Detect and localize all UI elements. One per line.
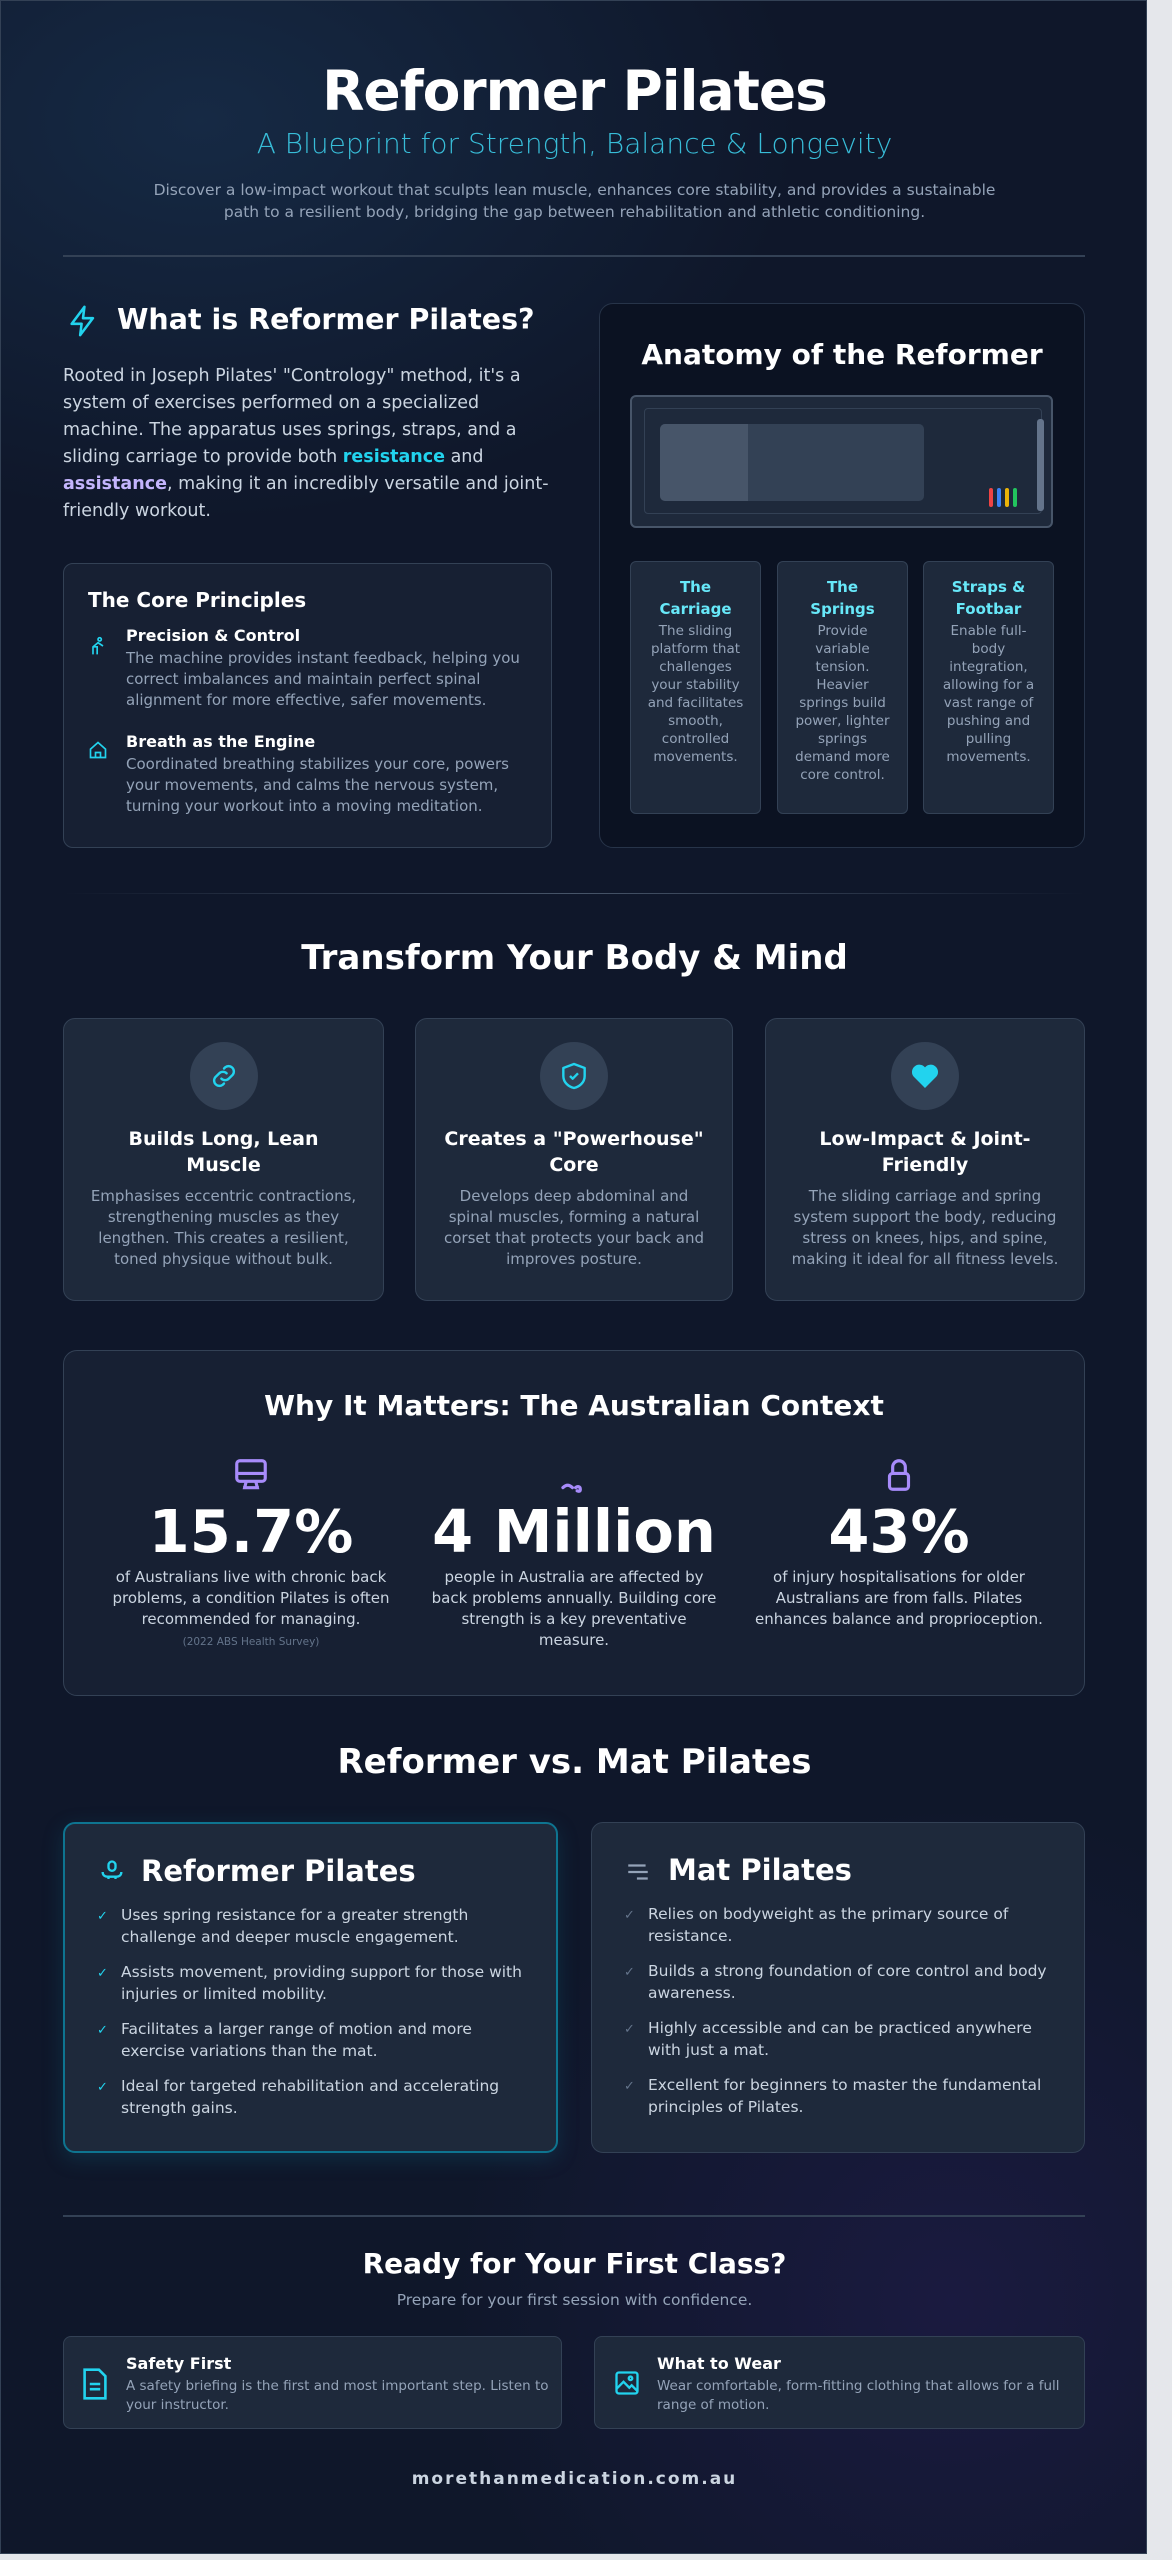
card: powerhouse core: Develops deep abdominal and spinal muscles, forming a natural corset that protects your back and improves posture. — [444, 1187, 704, 1268]
list: mat points: Highly accessible and can be practiced anywhere with just a mat. — [648, 2019, 1032, 2059]
list: mat points — [624, 1905, 1047, 2116]
card: long lean muscle — [63, 1018, 384, 1301]
card: carriage: The — [680, 578, 711, 596]
list: mat points: Builds a strong foundation of core control and body awareness. — [648, 1962, 1047, 2002]
card: long lean muscle: Muscle — [186, 1154, 261, 1176]
card: straps & footbar: Enable full-body integration, allowing for a vast range of pushing and pulling movements. — [943, 623, 1034, 765]
stat: 15.7%: of Australians live with chronic back problems, a condition Pilates is often recommended for managing. — [112, 1568, 390, 1628]
subtitle: A Blueprint for Strength, Balance & Longevity — [257, 127, 892, 160]
card: straps & footbar: Straps & — [952, 578, 1025, 596]
card: safety first: A safety briefing is the first and most important step. Listen to your instructor. — [126, 2378, 549, 2413]
principle: precision — [92, 626, 520, 709]
heading: mat: Mat Pilates — [668, 1853, 852, 1887]
panel: australian context — [63, 1350, 1085, 1696]
stat: 43%: of injury hospitalisations for older Australians are from falls. Pilates enhances balance and proprioception. — [755, 1568, 1043, 1628]
stat: 15.7%: 15.7% — [149, 1497, 353, 1566]
heading: core principles: The Core Principles — [88, 588, 306, 612]
card: safety first: Safety First — [126, 2354, 231, 2373]
heading: reformer vs mat: Reformer vs. Mat Pilates — [338, 1742, 812, 1782]
card: springs — [777, 561, 908, 814]
card: carriage: The sliding platform that challenges your stability and facilitates smooth, controlled movements. — [648, 623, 743, 765]
card: carriage — [630, 561, 761, 814]
list: reformer points: ✓ — [97, 1966, 108, 1981]
card: powerhouse core: Core — [549, 1154, 599, 1176]
list: reformer points: ✓ — [97, 1909, 108, 1924]
subheading: Prepare for your first session with confidence. — [397, 2291, 752, 2309]
list: reformer points: ✓ — [97, 2080, 108, 2095]
card: low impact: Low-Impact & Joint- — [819, 1128, 1031, 1150]
card: what to wear — [594, 2336, 1085, 2429]
panel: core principles — [63, 563, 552, 848]
list: mat points: ✓ — [624, 2079, 635, 2094]
panel: mat pilates — [591, 1822, 1085, 2153]
card: what to wear: Wear comfortable, form-fitting clothing that allows for a full range of motion. — [657, 2378, 1060, 2413]
list: reformer points: Assists movement, providing support for those with injuries or limited mobility. — [121, 1963, 522, 2003]
list: reformer points: ✓ — [97, 2023, 108, 2038]
card: long lean muscle: Emphasises eccentric contractions, strengthening muscles as they lengthen. This creates a resilient, toned physique without bulk. — [91, 1187, 356, 1268]
list: mat points: ✓ — [624, 1908, 635, 1923]
heading: what is reformer pilates: What is Reformer Pilates? — [117, 303, 535, 336]
card: long lean muscle: Builds Long, Lean — [128, 1128, 319, 1150]
heading: why it matters: Why It Matters: The Australian Context — [264, 1389, 884, 1422]
card: powerhouse core: Creates a "Powerhouse" — [444, 1128, 704, 1150]
stat: 4 million — [432, 1484, 716, 1649]
card: carriage: Carriage — [659, 600, 732, 618]
icon: lightning — [70, 306, 94, 336]
stat: 43% — [755, 1459, 1043, 1628]
heading: anatomy: Anatomy of the Reformer — [641, 338, 1043, 371]
intro paragraph: Rooted in Joseph Pilates' "Contrology" method, it's a system of exercises performed on a specialized machine. The apparatus uses springs, straps, and a sliding carriage to provide both resistance and assistance, making it an incredibly versatile and joint-friendly workout. — [63, 366, 549, 521]
icon: heart — [891, 1042, 959, 1110]
stat: 15.7%: (2022 ABS Health Survey) — [183, 1636, 319, 1648]
principle: breath: Breath as the Engine — [126, 732, 315, 751]
card: what to wear: What to Wear — [657, 2354, 781, 2373]
card: springs: The — [827, 578, 858, 596]
card: springs: Springs — [810, 600, 875, 618]
stat: 43%: 43% — [828, 1497, 970, 1566]
footer: morethanmedication.com.au — [412, 2469, 737, 2489]
card: low impact: The sliding carriage and spring system support the body, reducing stress on knees, hips, and spine, making it ideal for all fitness levels. — [792, 1187, 1058, 1268]
list: reformer points — [97, 1906, 522, 2117]
stat: 15.7% — [112, 1459, 390, 1648]
list: mat points: ✓ — [624, 1965, 635, 1980]
title: Reformer Pilates — [322, 59, 827, 123]
card: low impact: Friendly — [882, 1154, 968, 1176]
list: mat points: Relies on bodyweight as the primary source of resistance. — [648, 1905, 1008, 1945]
list: reformer points: Uses spring resistance for a greater strength challenge and deeper muscle engagement. — [121, 1906, 468, 1946]
card: springs: Provide variable tension. Heavier springs build power, lighter springs demand more core control. — [795, 623, 890, 783]
icon: link — [190, 1042, 258, 1110]
list: mat points: Excellent for beginners to master the fundamental principles of Pilates. — [648, 2076, 1041, 2116]
list: reformer points: Ideal for targeted rehabilitation and accelerating strength gains. — [121, 2077, 499, 2117]
diagram: reformer machine — [630, 395, 1053, 528]
heading: transform: Transform Your Body & Mind — [301, 938, 848, 978]
principle: breath — [90, 732, 509, 815]
panel: reformer pilates — [63, 1822, 558, 2153]
heading: reformer: Reformer Pilates — [141, 1854, 416, 1888]
stat: 4 million: people in Australia are affected by back problems annually. Building core strength is a key preventative measure. — [432, 1568, 716, 1649]
principle: precision: The machine provides instant feedback, helping you correct imbalances and maintain perfect spinal alignment for more effective, safer movements. — [126, 649, 520, 709]
card: low impact — [765, 1018, 1085, 1301]
card: straps & footbar: Footbar — [956, 600, 1021, 618]
card: safety first — [63, 2336, 562, 2429]
stat: 4 million: 4 Million — [432, 1497, 716, 1566]
card: straps & footbar — [923, 561, 1054, 814]
panel: anatomy of the reformer — [599, 303, 1085, 848]
principle: breath: Coordinated breathing stabilizes your core, powers your movements, and calms the nervous system, turning your workout into a moving meditation. — [126, 755, 509, 815]
heading: ready for first class: Ready for Your First Class? — [363, 2247, 786, 2280]
list: mat points: ✓ — [624, 2022, 635, 2037]
principle: precision: Precision & Control — [126, 626, 300, 645]
icon: shield — [540, 1042, 608, 1110]
card: powerhouse core — [415, 1018, 733, 1301]
intro text: Discover a low-impact workout that sculpts lean muscle, enhances core stability, and provides a sustainable path to a resilient body, bridging the gap between rehabilitation and athletic conditioning. — [154, 181, 995, 221]
list: reformer points: Facilitates a larger range of motion and more exercise variations than the mat. — [121, 2020, 472, 2060]
